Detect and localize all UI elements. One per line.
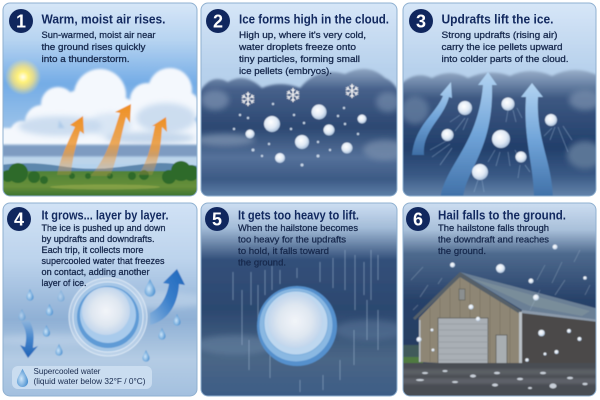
heading 4: It grows... layer by layer. [42,208,168,222]
rain streaks [233,250,378,392]
text: panel 2 description: ice pellets (embryos). [239,66,332,77]
text: panel 6 description: The hailstone falls through [438,223,549,234]
water drops [18,279,181,362]
hailstone with ice layers [69,278,147,356]
text: panel 2 description [238,30,366,77]
trees [2,161,199,184]
arrow: updraft [150,269,185,325]
icons: snowflakes [242,84,358,106]
barn [413,272,599,367]
side door [496,335,507,366]
arrow: downdraft [20,320,38,358]
dark cloud [195,69,407,199]
heading 2: Ice forms high in the cloud. [239,12,389,26]
text: panel 3 description: into colder parts of the cloud. [442,54,568,65]
text: panel 2 description: tiny particles, forming small [239,54,360,65]
text: panel 2 description: water droplets freeze onto [238,42,356,53]
text: panel 4 description: The ice is pushed up and down [42,223,166,234]
heading 3: Updrafts lift the ice. [442,12,554,26]
badge 2 [206,9,230,33]
text: panel 2 description: High up, where it's very cold, [239,30,366,41]
text: panel 4 description: Each trip, it collects more [42,245,144,256]
text: panel 3 description: Strong updrafts (rising air) [442,30,558,41]
panel 5: it gets too heavy to lift [195,200,405,399]
text: panel 4 description: layer of ice. [42,278,86,289]
text: panel 4 description: supercooled water that freezes [42,256,165,267]
garage door [438,318,488,365]
panel 4: it grows layer by layer [0,200,210,399]
legend: supercooled water [12,366,152,389]
ice pellets [233,103,366,166]
dark cloud [400,70,600,199]
badge 1 [9,9,33,33]
text: panel 1 description: the ground rises quickly [42,42,146,53]
heading 6: Hail falls to the ground. [438,208,566,222]
text: panel 6 description: the ground. [438,246,486,257]
hailstone [257,286,337,366]
ground with hail [404,362,596,396]
text: panel 4 description [42,223,166,289]
text: panel 6 description [438,223,549,257]
arrows: rising warm air [57,104,167,176]
text: panel 1 description: Sun-warmed, moist air near [42,30,156,41]
arrows: updrafts [412,72,553,199]
text: panel 5 description: too heavy for the updrafts [238,234,346,246]
badge 6 [406,207,430,231]
badge 4 [7,207,31,231]
badge 6: 6 [413,210,423,230]
panel 2: ice forms high in the cloud [195,0,407,199]
ice pellets with motion streaks [430,98,572,192]
text: panel 5 description: the ground. [238,258,286,268]
heading 5: It gets too heavy to lift. [238,208,359,222]
text: panel 3 description: carry the ice pellets upward [442,42,562,53]
text: panel 1 description [42,30,156,65]
cloud [0,68,200,157]
text: panel 4 description: by updrafts and downdrafts. [42,234,154,245]
panel 3: updrafts lift the ice [400,0,600,199]
text: panel 4 description: on contact, adding another [42,267,150,278]
badge 1: 1 [16,12,26,32]
text: panel 6 description: the downdraft and reaches [438,234,549,246]
icon: sun [5,59,41,95]
text: panel 5 description: to hold, it falls toward [238,246,329,257]
heading 1: Warm, moist air rises. [42,12,166,26]
badge 5 [205,207,229,231]
badge 3: 3 [416,12,426,32]
panel 1: warm moist air rises [0,0,200,199]
falling hailstones [411,244,590,362]
text: panel 5 description: When the hailstone becomes [238,223,358,234]
text: panel 1 description: into a thunderstorm. [42,54,130,65]
badge 4: 4 [14,210,24,230]
legend: supercooled water: Supercooled water [34,366,101,376]
legend: supercooled water: (liquid water below 32°F / 0°C) [34,376,146,386]
badge 5: 5 [212,210,222,230]
text: panel 5 description [238,223,358,268]
badge 3 [409,9,433,33]
badge 2: 2 [213,12,223,32]
panel 6: hail falls to the ground [400,200,599,399]
text: panel 3 description [442,30,568,65]
